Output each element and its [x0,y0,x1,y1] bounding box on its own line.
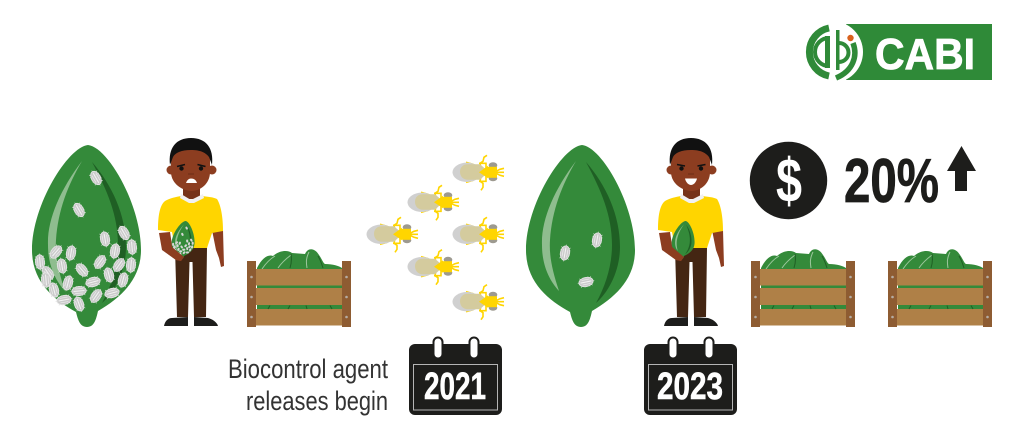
icon: dollar coin: $ [776,147,802,216]
stat: 20% increase: 20% [844,147,939,216]
crate of produce 2 [751,249,855,327]
crate of produce [247,249,351,327]
infested leaf [32,145,141,327]
calendar 2021: 2021 [424,366,486,408]
calendar 2023 [644,338,737,415]
crate of produce 3 [888,249,992,327]
biocontrol agents swarm [366,155,504,320]
logo: CABI [801,21,992,83]
text: biocontrol agent releases begin [228,354,388,416]
logo: CABI: CABI [875,30,975,79]
worried farmer holding infested leaf [158,138,224,326]
text: biocontrol agent releases begin: Biocontrol agent [228,354,388,384]
leaf after release with few pests [526,145,635,327]
arrow: up [947,146,976,191]
calendar 2021 [409,338,502,415]
text: biocontrol agent releases begin: releases begin [246,386,388,416]
calendar 2023: 2023 [657,366,723,408]
icon: dollar coin [750,142,827,219]
happy farmer holding healthy leaf [658,138,724,326]
